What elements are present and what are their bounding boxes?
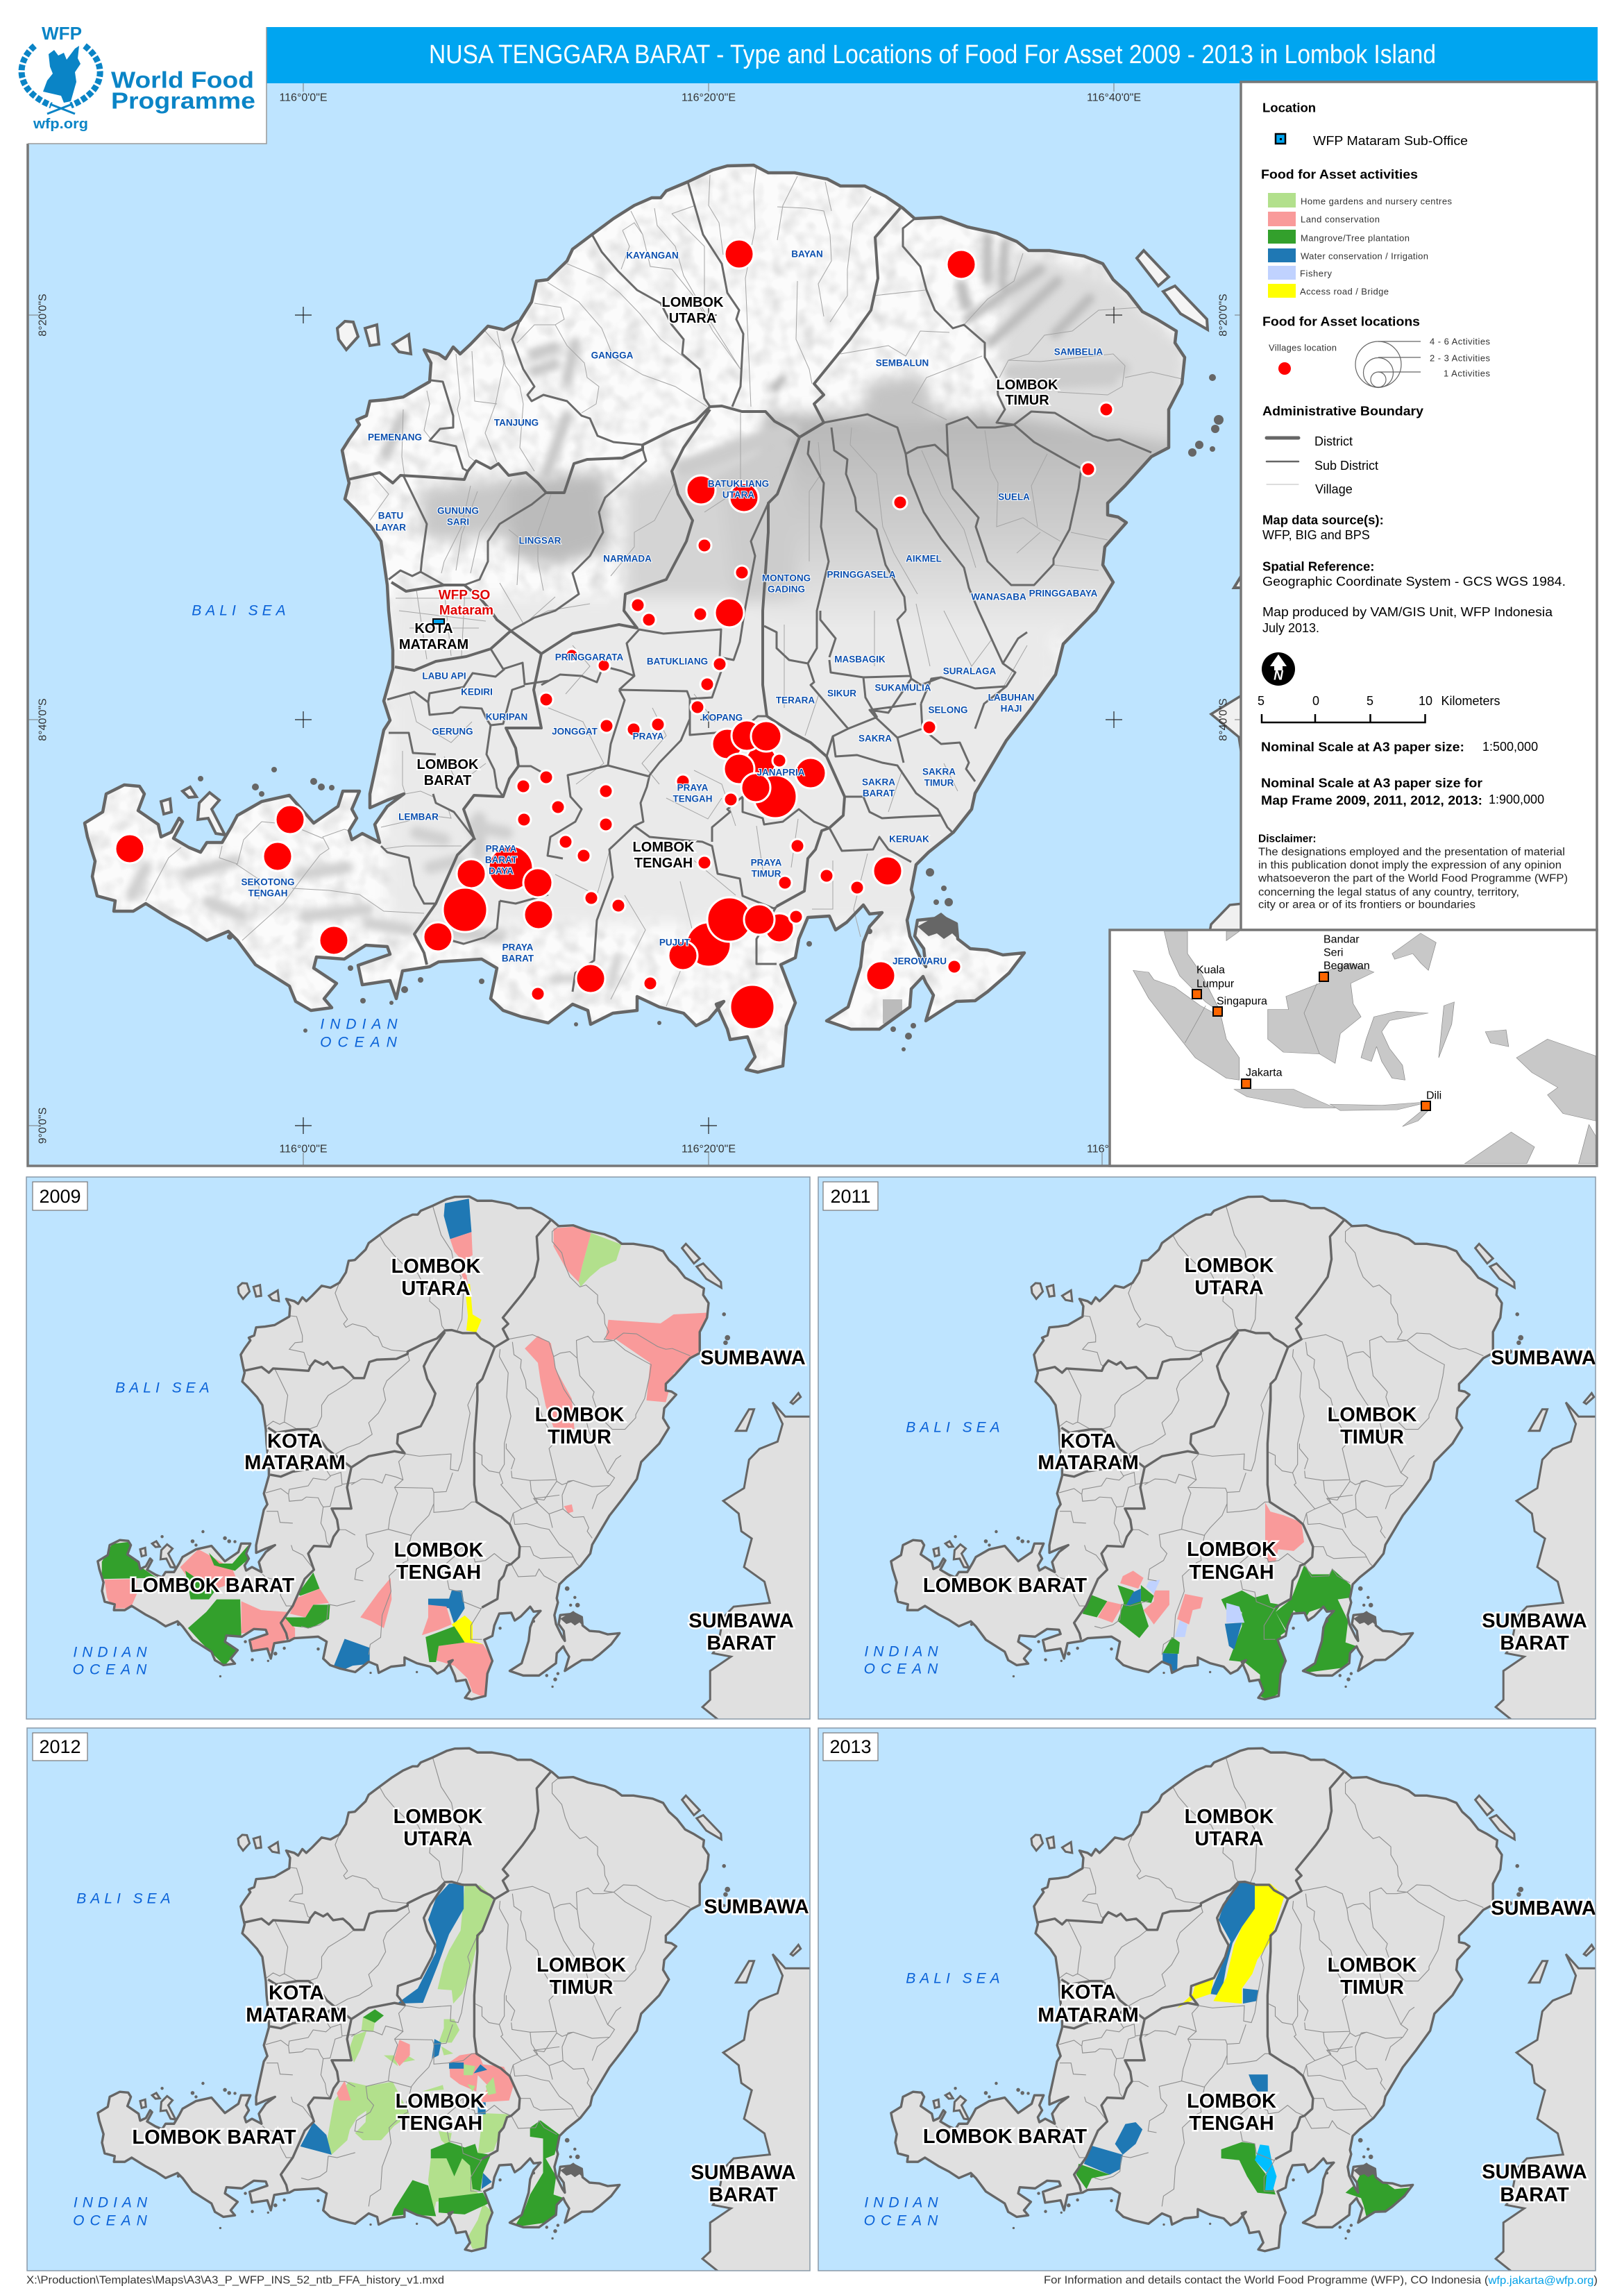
2013 sea labels: OCEAN	[864, 2212, 943, 2229]
activity labels: Water conservation / Irrigation	[1301, 251, 1428, 261]
main map: district boundaries	[348, 208, 900, 965]
panel: 2013 map	[818, 1728, 1624, 2295]
legend: activity counts: 4 - 6 Activities	[1430, 336, 1491, 347]
sub-district name labels: TANJUNG	[494, 418, 539, 427]
logo text: World Food Programme	[111, 67, 255, 114]
panel: 2009 map	[26, 1177, 847, 1759]
legend text: sub-office: WFP Mataram Sub-Office	[1313, 134, 1468, 148]
WFP sub-office label: WFP SO	[439, 588, 490, 602]
legend: proportional circles	[1355, 341, 1421, 387]
2012 place labels: KOTA	[269, 1982, 324, 2004]
2011 place labels: MATARAM	[1038, 1452, 1139, 1474]
inset capital labels: Singapura	[1217, 995, 1267, 1008]
legend: map producer	[1262, 605, 1553, 635]
graticule longitude labels: 116°40'0"E	[1087, 1144, 1141, 1155]
2011 place labels	[923, 1255, 1596, 1654]
inset capital labels: Jakarta	[1246, 1067, 1283, 1078]
2009 year box: 2009	[39, 1186, 81, 1207]
sub-district name labels: LABUHAN	[988, 693, 1034, 702]
graticule longitude labels: 116°0'0"E	[279, 1144, 328, 1155]
nominal scale notes: 1:500,000	[1482, 740, 1538, 754]
sub-district name labels: BATU	[378, 511, 403, 520]
2009 place labels: TIMUR	[548, 1426, 611, 1448]
graticule latitude labels: 8°20'0"S	[1217, 294, 1230, 337]
2009 sea labels: OCEAN	[73, 1661, 152, 1678]
2012 place labels: SUMBAWA	[691, 2162, 796, 2184]
logo emblem	[43, 46, 81, 103]
legend: map data source: WFP, BIG and BPS	[1262, 528, 1370, 542]
sub-district name labels: TENGAH	[248, 888, 287, 898]
logo text: World Food Programme: World Food	[111, 67, 254, 93]
2011 place labels: UTARA	[1194, 1277, 1264, 1299]
sub-district name labels: JEROWARU	[893, 956, 947, 966]
2011 boundaries and coast	[891, 1196, 1523, 1700]
graticule longitude labels: 116°20'0"E	[682, 1144, 736, 1155]
sub-district name labels: TIMUR	[924, 777, 954, 788]
2012 place labels: LOMBOK	[396, 2090, 484, 2112]
sub-district name labels: MONTONG	[762, 573, 811, 583]
panel: 2012 map	[27, 1728, 847, 2295]
2013 sea labels: BALI SEA	[906, 1971, 1004, 1986]
disclaimer: city or area or of its frontiers or boundaries	[1258, 899, 1475, 911]
2013 year box	[823, 1733, 878, 1761]
legend: spatial reference: Spatial Reference:	[1262, 559, 1374, 573]
sub-district name labels: SUELA	[998, 491, 1030, 502]
sub-district name labels: JANAPRIA	[756, 768, 805, 777]
village location dots	[115, 239, 1113, 1029]
2009 place labels: KOTA	[267, 1430, 323, 1453]
sub-district name labels: SAKRA	[858, 733, 892, 744]
sub-district name labels: NARMADA	[603, 554, 652, 564]
2009 place labels	[130, 1255, 806, 1654]
header banner	[267, 27, 1598, 83]
main map: land	[85, 165, 1185, 1072]
2011 base land	[891, 1196, 1624, 1759]
legend: boundary labels: Village	[1315, 482, 1353, 496]
footer: contact information: For Information and details contact the World Food Programme (WFP), CO Indonesia ( wfp.jakarta@wfp.org )	[1044, 2275, 1598, 2286]
activity colour swatches	[1268, 193, 1296, 298]
2012 place labels: TIMUR	[550, 1976, 613, 1999]
district name labels: LOMBOK	[662, 295, 724, 310]
sub-district name labels: MASBAGIK	[834, 654, 886, 665]
legend: map producer: Map produced by VAM/GIS Unit, WFP Indonesia	[1262, 605, 1553, 619]
disclaimer: in this publication donot imply the expression of any opinion	[1258, 859, 1562, 872]
sub-district name labels: GUNUNG	[437, 505, 479, 516]
2011 sea labels: OCEAN	[864, 1661, 943, 1677]
2011 frame	[818, 1177, 1596, 1719]
sea labels: OCEAN	[320, 1034, 403, 1051]
2011 place labels: BARAT	[1500, 1632, 1569, 1654]
disclaimer: whatsoeveron the part of the World Food Programme (WFP)	[1258, 873, 1568, 884]
legend: spatial reference: Geographic Coordinate System - GCS WGS 1984.	[1262, 575, 1566, 588]
sub-district name labels: BARAT	[863, 788, 895, 798]
sea labels	[192, 602, 403, 1051]
2011 place labels: LOMBOK	[1328, 1404, 1416, 1426]
legend: boundary labels: District	[1314, 434, 1353, 448]
2012 place labels: LOMBOK	[394, 1806, 482, 1828]
2013 place labels: UTARA	[1194, 1828, 1264, 1850]
legend: activity counts	[1430, 336, 1491, 379]
district name labels: LOMBOK	[997, 378, 1058, 393]
sub-district name labels: KOPANG	[702, 712, 743, 723]
sub-district name labels: SAKRA	[922, 766, 956, 777]
icon: WFP office	[433, 619, 444, 624]
2013 base land	[891, 1748, 1624, 2295]
2009 place labels: BARAT	[707, 1632, 776, 1654]
disclaimer: The designations employed and the presentation of material	[1258, 847, 1565, 858]
district name labels: TIMUR	[1005, 393, 1049, 408]
2009 activity areas	[102, 1199, 708, 1698]
scale bar labels: Kilometers	[1441, 694, 1500, 708]
scale bar labels: 0	[1312, 694, 1319, 708]
2012 place labels: BARAT	[709, 2184, 778, 2206]
district name labels: UTARA	[669, 311, 716, 326]
legend panel	[1241, 82, 1597, 930]
sub-district name labels	[241, 248, 1103, 966]
sub-district name labels: PEMENANG	[368, 432, 422, 443]
activity labels: Home gardens and nursery centres	[1301, 196, 1452, 207]
graticule latitude labels: 9°0'0"S	[37, 1108, 49, 1144]
2009 base land	[98, 1196, 847, 1759]
sub-district name labels: BATUKLIANG	[708, 479, 769, 489]
nominal scale notes	[1261, 740, 1544, 808]
2013 place labels: SUMBAWA	[1491, 1897, 1596, 1920]
2013 activity areas	[1076, 1881, 1413, 2216]
disclaimer	[1258, 833, 1568, 911]
district name labels: BARAT	[424, 773, 471, 788]
logo text: WFP: WFP	[42, 23, 82, 44]
legend: boundary labels	[1314, 434, 1378, 496]
2013 sea labels	[864, 1971, 1004, 2229]
main map: village boundaries	[146, 167, 1182, 1006]
inset capital labels: Bandar	[1323, 934, 1360, 945]
WFP sub-office label	[439, 588, 493, 618]
2013 place labels	[923, 1806, 1596, 2206]
2012 base land	[98, 1748, 847, 2295]
legend: spatial reference	[1262, 559, 1566, 588]
2012 sea labels: INDIAN	[74, 2194, 152, 2211]
2012 year box: 2012	[39, 1736, 81, 1757]
sub-district name labels: KEDIRI	[461, 687, 493, 697]
2009 place labels: SUMBAWA	[700, 1347, 806, 1369]
sub-district name labels: SEMBALUN	[876, 358, 929, 368]
logo text: World Food Programme: Programme	[111, 87, 255, 114]
2011 place labels: LOMBOK BARAT	[923, 1575, 1087, 1597]
sub-district name labels: PRAYA	[633, 731, 664, 741]
sub-district name labels: SARI	[447, 516, 469, 527]
main map: coastline	[85, 165, 1185, 1072]
district name labels: TENGAH	[634, 856, 693, 871]
sub-district name labels: KERUAK	[889, 834, 929, 844]
2009 year box	[33, 1182, 87, 1210]
sub-district name labels: GANGGA	[591, 350, 634, 361]
2011 place labels: TENGAH	[1189, 1561, 1274, 1584]
2012 place labels: SUMBAWA	[704, 1896, 809, 1918]
2011 activity areas	[1083, 1502, 1356, 1700]
icon: north arrow	[1262, 652, 1295, 686]
legend: boundary labels: Sub District	[1314, 459, 1378, 473]
2013 boundaries and coast	[891, 1748, 1523, 2251]
sub-district name labels: LEMBAR	[398, 812, 439, 822]
2009 place labels: MATARAM	[244, 1452, 346, 1474]
2013 sea labels: INDIAN	[864, 2194, 943, 2211]
sub-district name labels: SELONG	[928, 705, 968, 715]
footer: file path: X:\Production\Templates\Maps\A3\A3_P_WFP_INS_52_ntb_FFA_history_v1.mxd	[26, 2275, 444, 2286]
2011 place labels: TIMUR	[1340, 1426, 1404, 1448]
2011 place labels: LOMBOK	[1185, 1255, 1274, 1277]
2012 year box	[33, 1733, 87, 1761]
sub-district name labels: BATUKLIANG	[647, 657, 708, 666]
2012 sea labels	[73, 1890, 175, 2229]
2012 sea labels: OCEAN	[73, 2212, 153, 2229]
2013 place labels: KOTA	[1060, 1981, 1116, 2004]
sub-district name labels: GERUNG	[432, 726, 473, 737]
graticule longitude labels	[279, 92, 1141, 1155]
2009 place labels: UTARA	[401, 1278, 471, 1300]
sub-district name labels: PUJUT	[659, 937, 691, 948]
activity labels: Access road / Bridge	[1300, 286, 1389, 297]
2009 place labels: SUMBAWA	[688, 1610, 794, 1632]
sub-district name labels: SIKUR	[827, 688, 856, 698]
2009 place labels: LOMBOK	[535, 1404, 624, 1426]
2011 sea labels: BALI SEA	[906, 1420, 1004, 1435]
legend: activity counts: 2 - 3 Activities	[1430, 353, 1491, 364]
sub-district name labels: SEKOTONG	[241, 877, 295, 887]
2012 place labels: LOMBOK	[536, 1954, 626, 1976]
2009 place labels: LOMBOK BARAT	[130, 1575, 294, 1597]
2009 sea labels: BALI SEA	[115, 1380, 214, 1396]
logo wreath	[22, 46, 100, 114]
2013 place labels: TENGAH	[1189, 2112, 1274, 2135]
inset capital labels: Dili	[1426, 1090, 1441, 1102]
disclaimer: Disclaimer:	[1258, 833, 1317, 845]
2012 frame	[27, 1728, 810, 2271]
inset map: Indonesia location	[1110, 930, 1597, 1166]
2012 sea labels: BALI SEA	[76, 1890, 175, 1907]
graticule latitude labels: 8°20'0"S	[37, 294, 49, 337]
nominal scale notes: Nominal Scale at A3 paper size for	[1261, 776, 1482, 790]
sub-district name labels: BARAT	[485, 855, 518, 865]
title: NUSA TENGGARA BARAT - Type and Locations of Food For Asset 2009 - 2013 in Lombok Island	[429, 40, 1436, 69]
sub-district name labels: PRAYA	[751, 858, 782, 867]
2012 place labels	[132, 1806, 809, 2206]
sub-district name labels: SAMBELIA	[1054, 347, 1103, 357]
graticule longitude labels: 116°0'0"E	[279, 92, 328, 104]
sub-district name labels: HAJI	[1001, 704, 1022, 713]
2011 sea labels: INDIAN	[864, 1643, 943, 1660]
sub-district name labels: UTARA	[722, 490, 754, 500]
main map: islets	[198, 374, 1224, 1051]
2012 place labels: LOMBOK BARAT	[132, 2126, 296, 2149]
2013 place labels: BARAT	[1500, 2184, 1569, 2206]
legend heading: location: Location	[1262, 100, 1316, 115]
2011 sea labels	[864, 1420, 1004, 1677]
icon: north arrow: N	[1274, 669, 1284, 683]
sub-district name labels: SAKRA	[862, 777, 895, 787]
legend: map producer: July 2013.	[1262, 621, 1319, 635]
2013 place labels: LOMBOK	[1187, 2090, 1276, 2112]
sub-district name labels: BARAT	[502, 954, 534, 963]
legend: map data source	[1262, 512, 1384, 542]
2013 place labels: TIMUR	[1340, 1976, 1404, 1999]
sub-district name labels: KAYANGAN	[626, 250, 679, 261]
main map: Lombok food for asset locations	[29, 83, 1240, 1165]
sub-district name labels: SURALAGA	[943, 666, 996, 676]
sub-district name labels: LABU API	[422, 670, 466, 681]
2009 boundaries and coast	[98, 1196, 730, 1700]
inset capital labels: Kuala	[1196, 965, 1225, 976]
activity labels: Fishery	[1300, 268, 1333, 279]
main map frame	[28, 144, 1597, 1166]
legend heading: locations: Food for Asset locations	[1262, 314, 1420, 329]
2011 place labels: KOTA	[1060, 1430, 1116, 1453]
district name labels: LOMBOK	[417, 757, 479, 772]
logo text: wfp.org: wfp.org	[33, 117, 88, 132]
sub-district name labels: PRINGGABAYA	[1029, 588, 1098, 598]
2013 year box: 2013	[829, 1736, 872, 1757]
sub-district name labels: WANASABA	[971, 591, 1026, 602]
inset capital markers	[1192, 972, 1430, 1110]
WFP sub-office label: Mataram	[439, 604, 493, 618]
graticule latitude labels: 8°40'0"S	[1217, 698, 1230, 741]
legend heading: administrative boundary: Administrative Boundary	[1262, 404, 1424, 418]
2012 boundaries and coast	[98, 1748, 730, 2251]
scale bar labels: 10	[1419, 694, 1432, 708]
inset capital labels: Seri	[1323, 947, 1343, 959]
scale bar	[1258, 694, 1500, 722]
2009 place labels: LOMBOK	[394, 1539, 483, 1561]
activity labels	[1300, 196, 1452, 297]
2011 place labels: SUMBAWA	[1482, 1610, 1587, 1632]
graticule latitude labels: 8°40'0"S	[37, 698, 49, 741]
legend: map data source: Map data source(s):	[1262, 512, 1384, 527]
district name labels: LOMBOK	[633, 840, 695, 855]
sub-district name labels: PRAYA	[486, 844, 517, 854]
sub-district name labels: BAYAN	[791, 248, 823, 260]
main map: sub-district boundaries	[381, 182, 1151, 992]
sub-district name labels: LAYAR	[375, 522, 406, 533]
2012 place labels: MATARAM	[246, 2004, 347, 2026]
2012 place labels: UTARA	[403, 1828, 473, 1850]
2011 place labels: SUMBAWA	[1491, 1347, 1596, 1369]
district name labels: MATARAM	[399, 637, 468, 652]
legend heading: activities: Food for Asset activities	[1261, 167, 1418, 182]
sea labels: BALI SEA	[192, 602, 290, 619]
legend: activity counts: 1 Activities	[1444, 368, 1491, 379]
nominal scale notes: Map Frame 2009, 2011, 2012, 2013:	[1261, 793, 1482, 808]
sub-district name labels: TENGAH	[673, 794, 712, 804]
sub-district name labels: DAYA	[489, 866, 514, 876]
2011 year box: 2011	[830, 1186, 871, 1207]
scale bar labels: 5	[1258, 694, 1264, 708]
2013 place labels: LOMBOK BARAT	[923, 2126, 1087, 2148]
sub-district name labels: KURIPAN	[486, 712, 527, 722]
district name labels	[399, 295, 1058, 871]
icon: WFP Mataram sub-office	[1276, 134, 1285, 144]
inset capital labels: Lumpur	[1196, 979, 1235, 990]
2012 place labels: TENGAH	[398, 2112, 482, 2135]
legend: village dot	[1278, 362, 1291, 375]
sub-district name labels: JONGGAT	[552, 726, 598, 737]
2013 place labels: MATARAM	[1038, 2004, 1139, 2026]
legend: boundary line samples	[1267, 438, 1299, 484]
2012 activity areas	[301, 1883, 564, 2249]
2013 frame	[818, 1728, 1596, 2271]
sub-district name labels: PRINGGASELA	[827, 569, 896, 580]
2011 year box	[823, 1182, 878, 1210]
panel: 2011 map	[818, 1177, 1624, 1759]
legend text: villages location: Villages location	[1269, 343, 1337, 353]
graticule longitude labels: 116°20'0"E	[682, 92, 736, 104]
inset capital labels: Begawan	[1323, 960, 1370, 972]
inset land masses	[1133, 931, 1596, 1164]
sub-district name labels: PRAYA	[502, 942, 534, 952]
2009 place labels: TENGAH	[396, 1561, 481, 1584]
2013 place labels: LOMBOK	[1185, 1806, 1274, 1828]
logo: World Food Programme	[0, 0, 267, 144]
sub-district name labels: TIMUR	[752, 869, 781, 879]
nominal scale notes: Nominal Scale at A3 paper size:	[1261, 740, 1464, 754]
inset capital labels	[1196, 934, 1441, 1102]
graticule ticks	[28, 83, 1244, 1166]
sub-district name labels: PRINGGARATA	[555, 652, 623, 662]
graticule latitude labels	[37, 294, 1230, 1144]
sea labels: INDIAN	[320, 1016, 403, 1033]
disclaimer: concerning the legal status of any country, territory,	[1258, 887, 1519, 898]
2013 place labels: SUMBAWA	[1482, 2161, 1587, 2183]
2013 place labels: LOMBOK	[1328, 1954, 1416, 1976]
sub-district name labels: LINGSAR	[519, 536, 561, 545]
activity labels: Land conservation	[1301, 214, 1380, 225]
sub-district name labels: TERARA	[776, 695, 815, 705]
district name labels: KOTA	[414, 621, 453, 636]
scale bar labels: 5	[1367, 694, 1373, 708]
sub-district name labels: AIKMEL	[906, 554, 942, 564]
graticule longitude labels: 116°40'0"E	[1087, 92, 1141, 104]
sub-district name labels: SUKAMULIA	[874, 683, 931, 693]
2009 place labels: LOMBOK	[391, 1255, 480, 1278]
main map: hillshade relief	[69, 160, 1208, 1076]
2009 sea labels: INDIAN	[73, 1645, 152, 1660]
sub-district name labels: PRAYA	[677, 783, 709, 793]
2011 place labels: LOMBOK	[1187, 1539, 1276, 1561]
scale bar labels	[1258, 694, 1500, 708]
2009 sea labels	[73, 1380, 214, 1678]
main map: small islands	[161, 251, 1351, 835]
sub-district name labels: GADING	[768, 584, 805, 594]
main map: Sumbawa coast	[1209, 695, 1240, 929]
activity labels: Mangrove/Tree plantation	[1301, 233, 1410, 243]
2009 frame	[26, 1177, 810, 1719]
nominal scale notes: 1:900,000	[1489, 793, 1544, 806]
graticule crosses	[295, 307, 1122, 1134]
